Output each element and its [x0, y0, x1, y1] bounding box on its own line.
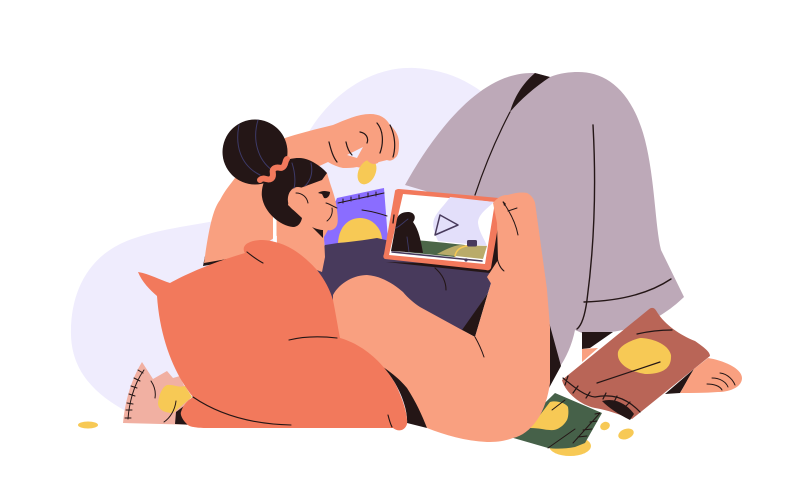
left shoe and bag on floor [123, 362, 200, 425]
coral pillow / sweater [138, 240, 407, 430]
brown chip bag [562, 308, 710, 420]
crumbs on the floor [78, 420, 635, 441]
right foot [582, 332, 742, 394]
tablet [383, 189, 505, 273]
dark shadow behind knee [383, 367, 427, 428]
green chip bag [510, 393, 602, 456]
arm crease [475, 337, 484, 357]
dark purple top [310, 238, 495, 337]
skin thigh and forearm holding tablet [333, 193, 550, 442]
head with bun and hair [222, 120, 338, 272]
fingers over tablet [487, 193, 547, 290]
raised arm and hand [203, 114, 399, 266]
background lavender blob [71, 68, 530, 418]
trousers [405, 72, 684, 388]
purple chip bag [323, 188, 388, 250]
